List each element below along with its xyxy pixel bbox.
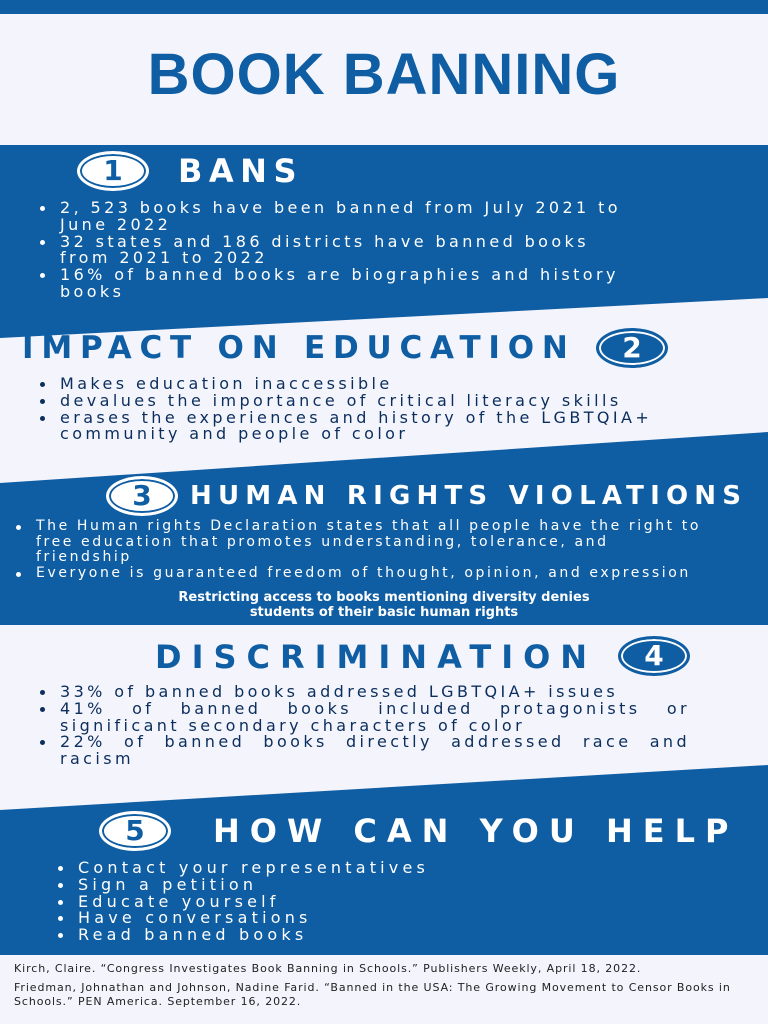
icon: number 4: 4: [644, 639, 664, 672]
section 1: bans: [40, 151, 621, 301]
section 5: how can you help: [58, 811, 738, 944]
bullet list: 22% of banned books directly addressed race and racism: [60, 732, 690, 768]
bullet list: 41% of banned books included protagonists or significant secondary characters of color: [60, 699, 690, 735]
bullet list: Sign a petition: [78, 875, 257, 894]
bullet list: devalues the importance of critical literacy skills: [60, 391, 622, 410]
icon: number 4: [618, 636, 690, 676]
bullet list: erases the experiences and history of the LGBTQIA+ community and people of color: [60, 408, 652, 443]
heading: human rights: HUMAN RIGHTS VIOLATIONS: [190, 481, 747, 511]
callout: bold statement: [178, 590, 590, 620]
footer: citations: [14, 962, 731, 1008]
icon: number 2: 2: [622, 331, 642, 364]
title: BOOK BANNING: [148, 42, 620, 107]
bullet list: The Human rights Declaration states that all people have the right to: [36, 518, 701, 534]
footer: citations: Friedman, Johnathan and Johnson, Nadine Farid. “Banned in the USA: The Growing Movement to Censor Books in Schools.” PEN America. September 16, 2022.: [14, 981, 731, 1008]
bullet list: Have conversations: [78, 908, 312, 927]
icon: number 3: [106, 476, 178, 516]
callout: bold statement: Restricting access to books mentioning diversity denies: [178, 590, 590, 605]
bullet list: 33% of banned books addressed LGBTQIA+ issues: [60, 682, 618, 701]
bullet list: friendship: [36, 549, 132, 565]
bullet list: Everyone is guaranteed freedom of thought, opinion, and expression: [36, 564, 691, 580]
bullet list: Contact your representatives: [78, 858, 429, 877]
bullet list: Makes education inaccessible: [60, 374, 393, 393]
bullet list: Educate yourself: [78, 892, 280, 911]
section 4: discrimination: [40, 636, 690, 768]
bullet list: [58, 858, 429, 944]
bullet list: 16% of banned books are biographies and history books: [60, 265, 619, 301]
icon: number 5: 5: [125, 814, 145, 847]
bullet list: [40, 682, 690, 768]
bullet list: 2, 523 books have been banned from July 2021 to June 2022: [60, 198, 621, 234]
heading: impact: IMPACT ON EDUCATION: [22, 330, 576, 366]
icon: number 5: [99, 811, 171, 851]
footer: citations: Kirch, Claire. “Congress Investigates Book Banning in Schools.” Publishers Weekly, April 18, 2022.: [14, 962, 641, 975]
bullet list: [40, 374, 652, 443]
icon: number 1: 1: [103, 154, 123, 187]
heading: help: HOW CAN YOU HELP: [213, 812, 738, 850]
bullet list: free education that promotes understanding, tolerance, and: [36, 534, 609, 550]
heading: discrimination: DISCRIMINATION: [155, 638, 597, 676]
bullet list: 32 states and 186 districts have banned books from 2021 to 2022: [60, 232, 589, 267]
icon: number 1: [77, 151, 149, 191]
icon: number 3: 3: [132, 479, 152, 512]
heading: bans: BANS: [178, 152, 303, 190]
bullet list: Read banned books: [78, 925, 307, 944]
bullet list: [16, 518, 701, 580]
icon: number 2: [596, 328, 668, 368]
section 3: human rights violations: [16, 476, 747, 620]
callout: bold statement: students of their basic human rights: [250, 605, 518, 620]
section 2: impact on education: [22, 328, 668, 443]
bullet list: [40, 198, 621, 301]
